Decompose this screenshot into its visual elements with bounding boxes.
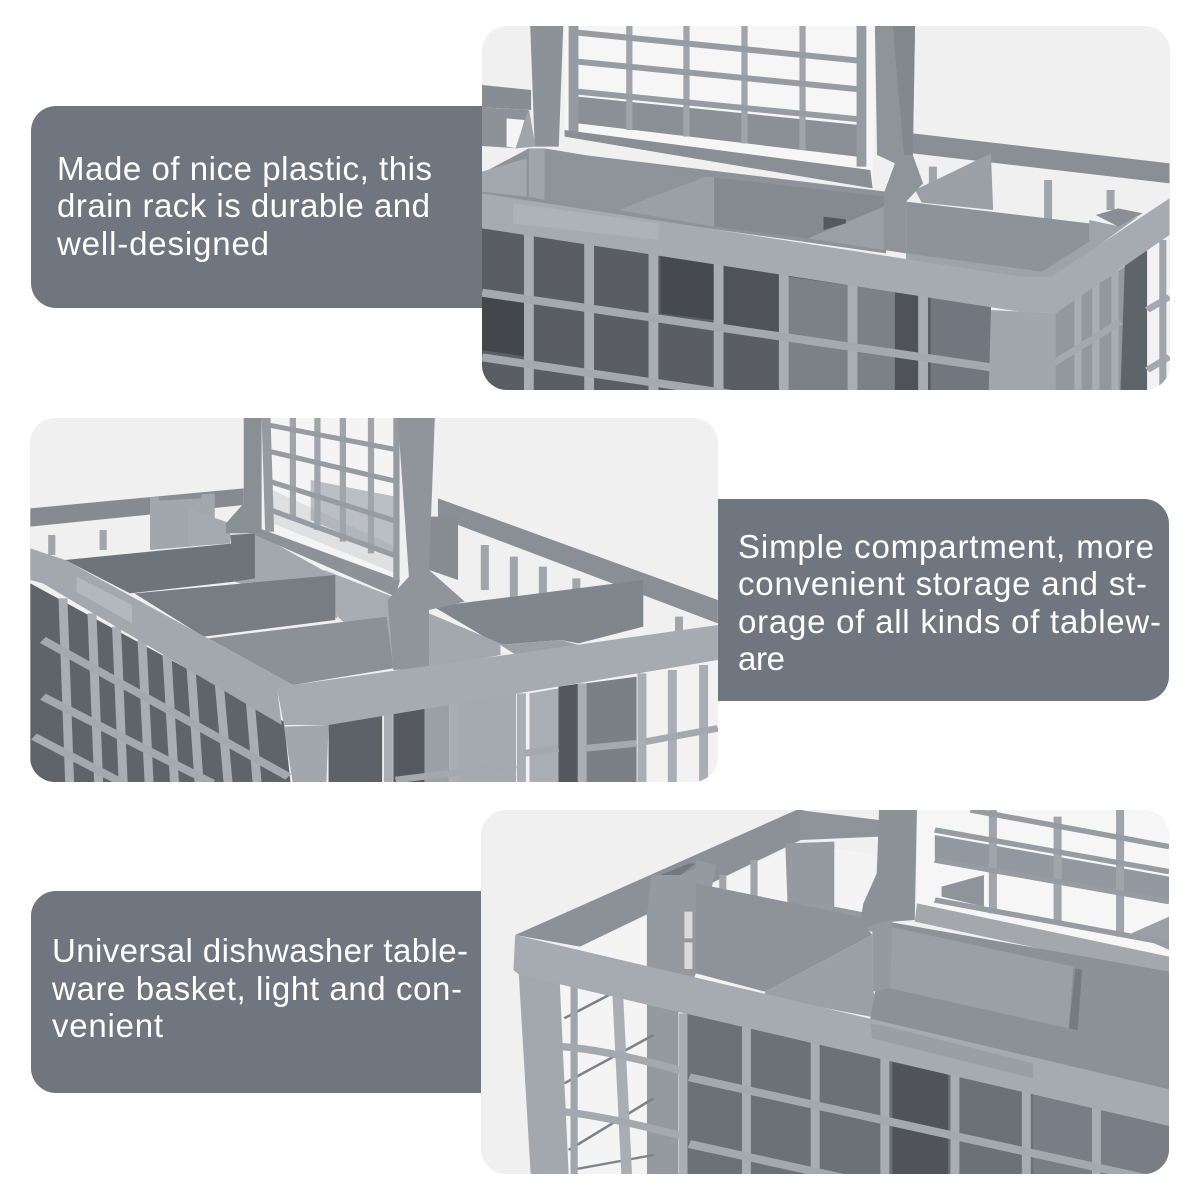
back wall and floor [190,518,230,546]
lower windows [646,1006,647,1174]
text: caption two: orage of all kinds of tablew- [738,603,1161,640]
panel: bottom product photo [481,810,1169,1200]
text: caption three: ware basket, light and con- [51,970,462,1007]
compartment walls [696,883,872,992]
panel: top caption [31,106,482,308]
grid lid [917,810,1169,963]
inner wall and flap [870,922,1169,1093]
front bars [529,233,923,393]
text: caption three: venient [52,1007,163,1044]
text: caption one: well-designed [56,225,269,262]
front left post [519,973,569,1177]
text: caption one: drain rack is durable and [57,187,430,224]
text: caption one: Made of nice plastic, this [57,150,432,187]
front rim [513,935,1169,1126]
corner post [989,310,1056,393]
front bars [683,1013,1096,1177]
text: caption two: convenient storage and st- [738,565,1147,602]
post [647,860,716,1177]
rims [30,548,293,725]
flip-up grid lid [565,26,877,188]
posts [530,26,563,147]
back walls [580,843,877,1013]
text: caption two: are [738,640,785,677]
side panel [1054,266,1148,390]
left post [226,418,262,533]
front rim [482,193,1170,313]
dark front windows [482,227,991,393]
panel: middle caption [718,499,1169,701]
right post handle [388,418,465,670]
panel: bottom caption [31,891,481,1093]
back rims [30,488,244,527]
left post of lid [859,810,917,928]
right compartment [906,217,1138,280]
compartments [65,543,235,593]
panel: middle product photo [30,418,718,783]
text: caption three [51,932,468,1044]
text: caption two [738,528,1161,677]
text: caption one [56,150,432,262]
front lower section [329,658,718,783]
thin back bars [564,995,654,1170]
left side grid [30,583,291,783]
text: caption three: Universal dishwasher table- [52,932,468,969]
grid lid [264,418,399,580]
text: caption two: Simple compartment, more [738,528,1154,565]
panel: top product photo [482,26,1170,390]
back rims [482,85,531,110]
tub back wall [482,148,886,253]
